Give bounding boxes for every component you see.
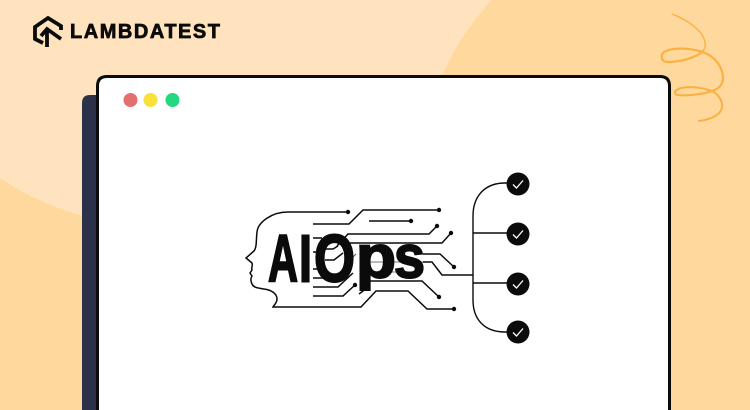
- circuit end nodes: [346, 208, 456, 311]
- background: light peach blob: [0, 0, 491, 220]
- icon: logo mark: [35, 18, 61, 47]
- circuit lines: [313, 210, 473, 297]
- check badge 2: [506, 222, 530, 246]
- logo wordmark: LAMBDATEST: [70, 21, 220, 43]
- AIOps title: I: [299, 222, 312, 296]
- AIOps title: p: [356, 224, 396, 290]
- browser window: [98, 76, 670, 410]
- check badge 3: [506, 272, 530, 296]
- yellow dot: [144, 93, 158, 107]
- window control dots: [124, 93, 180, 107]
- green dot: [166, 93, 180, 107]
- check badges: [506, 172, 530, 344]
- window back shadow: [82, 95, 97, 410]
- AIOps title: O: [314, 222, 355, 296]
- diagram: AIOps head circuit: [246, 208, 473, 311]
- head outline: [246, 212, 454, 309]
- squiggle decoration: [662, 14, 723, 121]
- branching connector: [473, 183, 517, 332]
- logo: LambdaTest: [35, 18, 220, 47]
- red dot: [124, 93, 138, 107]
- check badge 1: [506, 172, 530, 196]
- AIOps title: A: [268, 222, 298, 296]
- check badge 4: [506, 320, 530, 344]
- AIOps title: s: [394, 224, 425, 290]
